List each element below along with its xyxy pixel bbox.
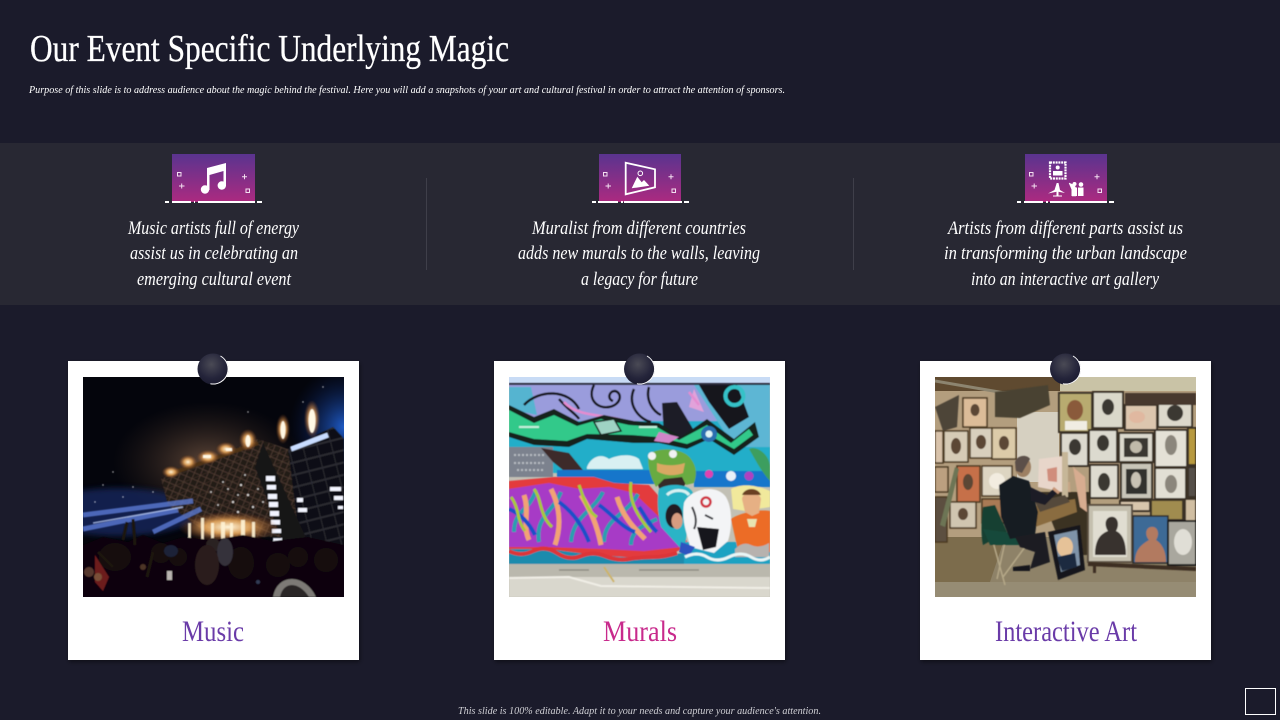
decorative right frames bbox=[1059, 392, 1196, 521]
icon: music note bbox=[165, 154, 262, 202]
photo: concert stage bbox=[83, 377, 344, 597]
text block: music: emerging cultural event bbox=[137, 270, 292, 290]
text block: murals: adds new murals to the walls, leaving bbox=[518, 244, 760, 264]
text block: interactive art: in transforming the urban landscape bbox=[944, 244, 1187, 264]
label: Interactive Art bbox=[995, 615, 1138, 648]
text block: music: assist us in celebrating an bbox=[130, 244, 298, 264]
subtitle: Purpose of this slide is to address audience about the magic behind the festival. Here you will add a snapshots of your art and cultural festival in order to attract the attention of sponsors. bbox=[28, 84, 785, 96]
pin bbox=[198, 354, 228, 384]
icon: artist and gallery bbox=[1017, 154, 1114, 202]
panel: music card bbox=[38, 354, 399, 660]
text block: murals: Muralist from different countries bbox=[531, 219, 746, 239]
navigation box bbox=[1246, 688, 1276, 714]
label: Music bbox=[182, 615, 244, 648]
decorative fire row bbox=[162, 400, 320, 478]
text block: interactive art: into an interactive art gallery bbox=[971, 270, 1160, 290]
panel: interactive art card bbox=[920, 354, 1211, 660]
panel: murals card bbox=[494, 354, 785, 660]
text block: music bbox=[127, 219, 300, 290]
text block: murals: a legacy for future bbox=[581, 270, 698, 290]
photo: portrait artist bbox=[935, 377, 1196, 597]
text block: murals bbox=[518, 219, 760, 290]
title: Our Event Specific Underlying Magic bbox=[30, 28, 509, 70]
photo: graffiti wall bbox=[509, 377, 770, 597]
text block: music: Music artists full of energy bbox=[127, 219, 300, 239]
label: Murals bbox=[603, 615, 677, 648]
pin bbox=[624, 354, 655, 384]
footer note: This slide is 100% editable. Adapt it to your needs and capture your audience's attention. bbox=[458, 706, 821, 717]
text block: interactive art: Artists from different parts assist us bbox=[946, 219, 1183, 239]
icon: mural picture frame bbox=[592, 154, 689, 202]
panel: highlights band bbox=[0, 143, 1280, 305]
decorative easel and canvas bbox=[1038, 456, 1063, 492]
pin bbox=[1050, 354, 1081, 384]
text block: interactive art bbox=[944, 219, 1187, 290]
decorative left frames bbox=[935, 398, 1016, 542]
decorative large frames bbox=[1088, 505, 1132, 562]
